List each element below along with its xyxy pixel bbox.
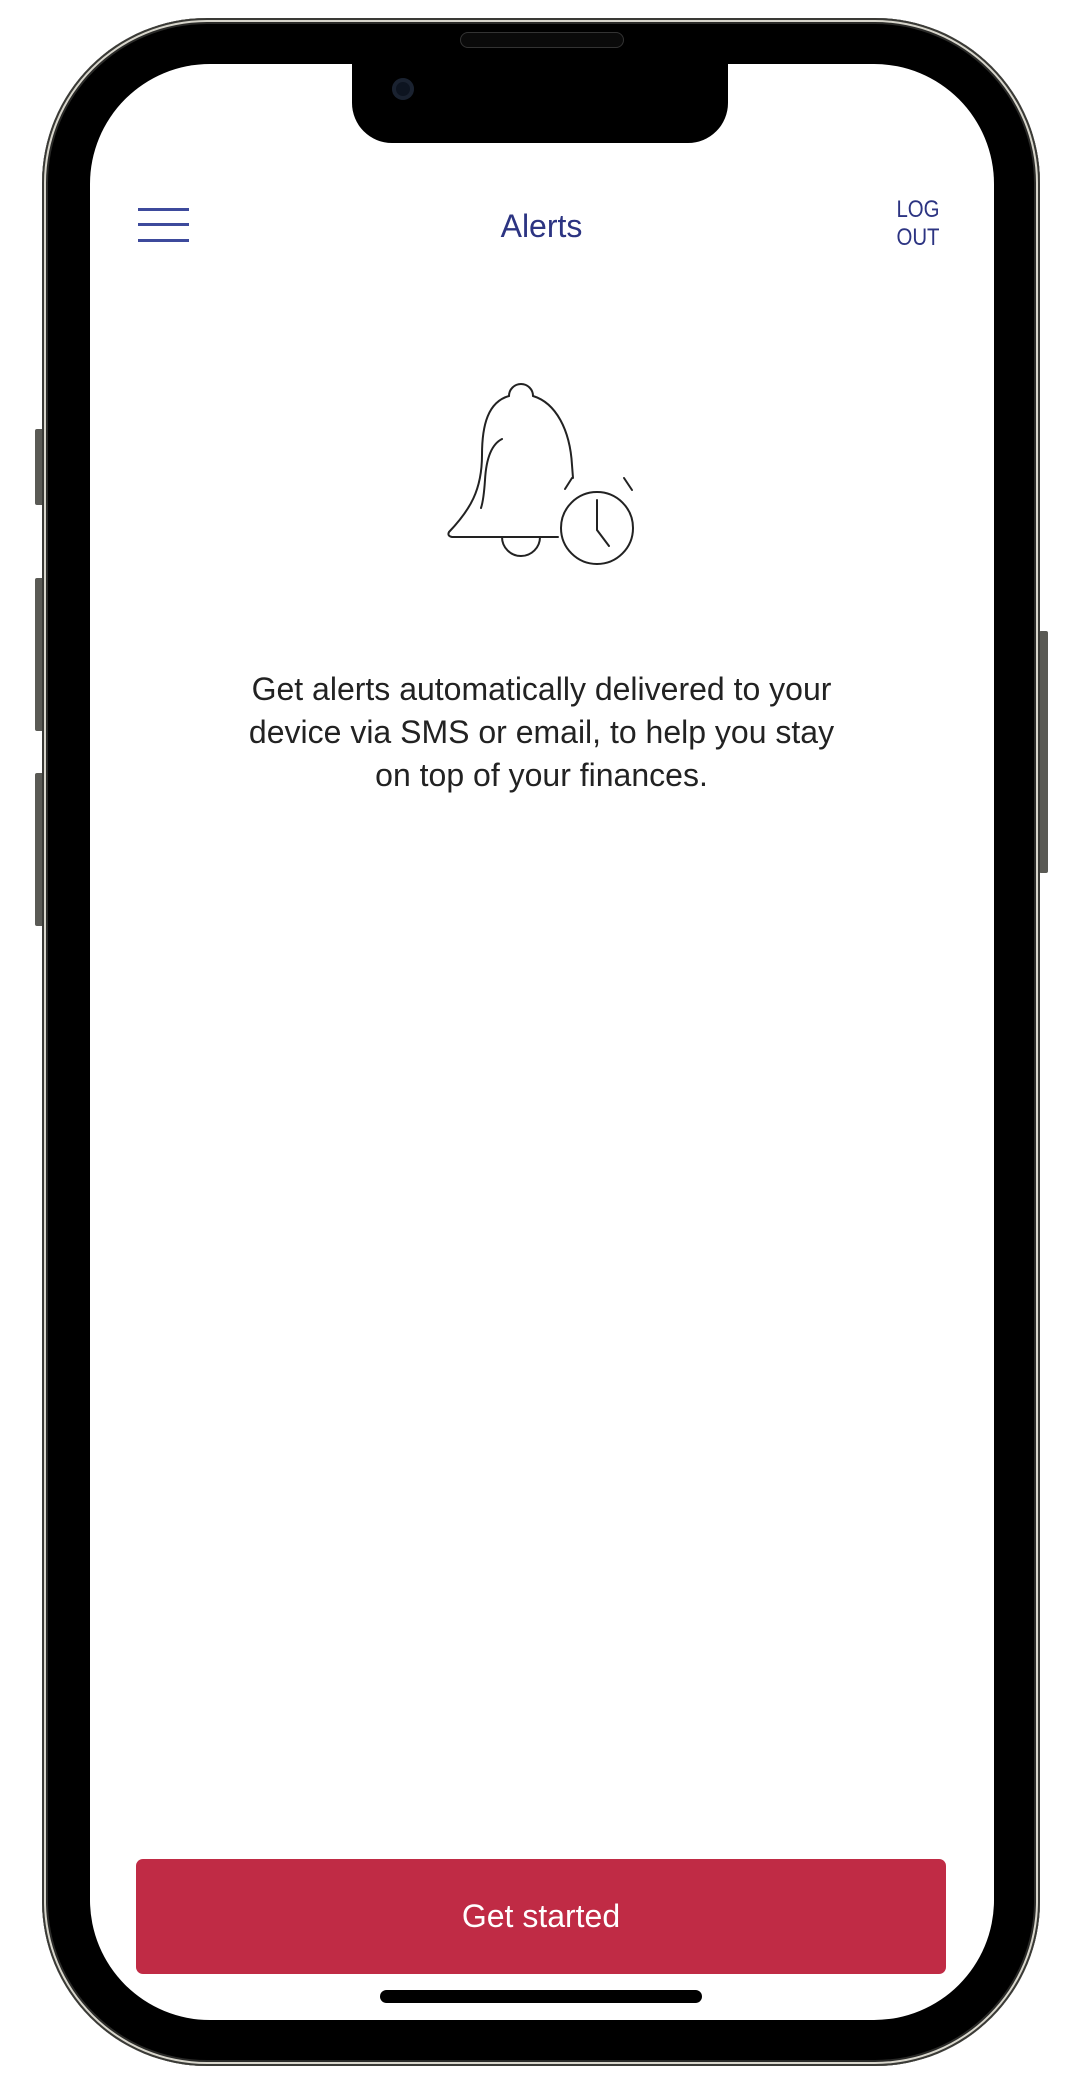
icon: camera [392,78,414,100]
description text: on top of your finances. [375,757,708,793]
description text: Get alerts automatically delivered to your [252,671,831,707]
description text [249,671,834,793]
button: get started: Get started [462,1898,620,1934]
log out link [896,196,940,251]
icon: hamburger menu [138,208,189,242]
icon: bell with clock [447,383,634,565]
button: get started [136,1859,946,1974]
log out link: OUT [896,224,940,251]
speaker [460,32,624,48]
description text: device via SMS or email, to help you stay [249,714,834,750]
home indicator [380,1990,702,2003]
phone screen [90,64,994,2020]
log out link: LOG [896,196,940,223]
title: Alerts [501,208,582,244]
notch [352,60,728,143]
